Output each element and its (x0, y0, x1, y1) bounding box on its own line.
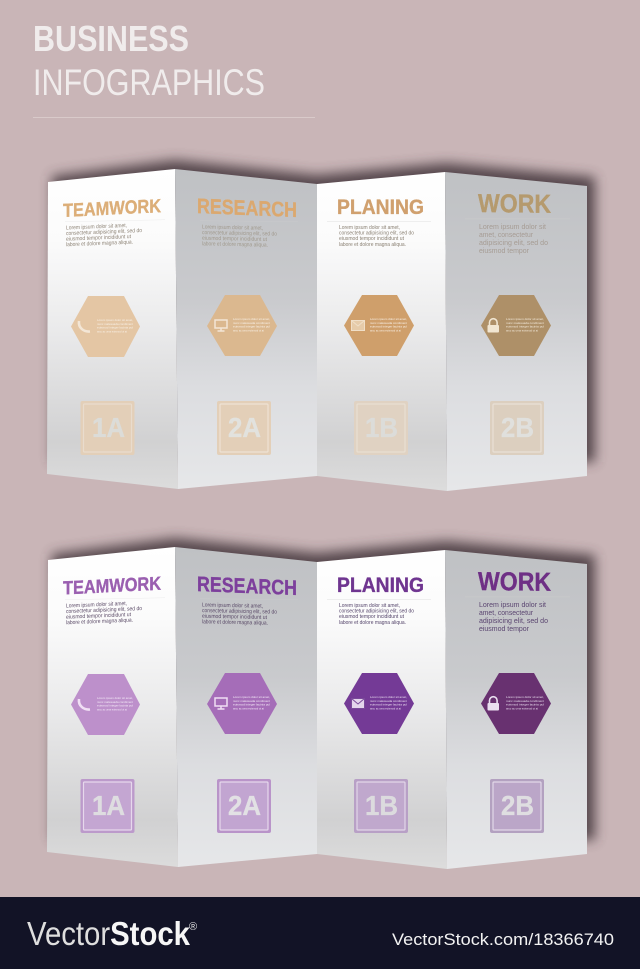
hexagon with monitor icon: arcu ac urna euismod ut at (233, 706, 264, 710)
panel: research (175, 169, 317, 489)
hexagon with lock icon: nunc malesuada condiment (506, 699, 544, 703)
hexagon with phone icon: arcu ac urna euismod ut at (97, 329, 127, 333)
text block: planing: consectetur adipisicing elit, sed do (339, 609, 414, 615)
heading: work: WORK (478, 188, 551, 219)
text block: teamwork: eiusmod tempor incididunt ut (66, 612, 131, 621)
text block: work: eiusmod tempor (479, 246, 529, 255)
panel: teamwork (47, 547, 178, 867)
brochure shadow (52, 538, 595, 840)
text block: work: amet, consectetur (479, 230, 533, 239)
hexagon with phone icon: Lorem ipsum dolor sit amet, (97, 696, 133, 700)
text block: research: eiusmod tempor incididunt ut (202, 614, 267, 621)
hexagon with lock icon (481, 295, 551, 356)
badge: 2A: 2A (228, 412, 261, 443)
hexagon with envelope icon: nunc malesuada condiment (370, 699, 407, 703)
text block: research: Lorem ipsum dolor sit amet, (202, 225, 263, 232)
brochure: orange (47, 160, 595, 491)
hexagon with lock icon: arcu ac urna euismod ut at (506, 706, 538, 710)
hexagon with lock icon: euismod integer lacinia pul (506, 325, 545, 329)
hexagon with lock icon (481, 673, 551, 734)
hexagon with lock icon: euismod integer lacinia pul (506, 703, 545, 707)
hexagon with monitor icon: euismod integer lacinia pul (233, 703, 271, 707)
text block: work: adipisicing elit, sed do (479, 616, 548, 625)
text block: planing (339, 225, 414, 248)
text block: work: amet, consectetur (479, 608, 533, 617)
text block: planing (339, 603, 414, 626)
hexagon with phone icon: Lorem ipsum dolor sit amet, (97, 318, 133, 322)
text block: work: eiusmod tempor (479, 624, 529, 633)
hexagon with monitor icon: Lorem ipsum dolor sit amet, (233, 695, 270, 699)
badge: 2B (490, 779, 544, 833)
panel: planing (317, 550, 447, 869)
text block: teamwork: labore et dolore magna aliqua. (66, 618, 133, 626)
hexagon with phone icon: nunc malesuada condiment (97, 322, 133, 326)
badge: 1A: 1A (92, 790, 125, 821)
badge: 2B: 2B (501, 412, 534, 443)
hexagon with envelope icon (344, 673, 414, 734)
text block: planing: Lorem ipsum dolor sit amet, (339, 603, 400, 609)
heading: research: RESEARCH (197, 573, 297, 600)
text block: work (479, 600, 548, 633)
hexagon with lock icon: nunc malesuada condiment (506, 321, 544, 325)
hexagon with phone icon (71, 296, 140, 357)
VectorStock logo: VectorStock (27, 915, 191, 952)
badge: 2A (217, 401, 271, 455)
badge: 2B: 2B (501, 790, 534, 821)
hexagon with monitor icon (207, 295, 277, 356)
heading: planing: PLANING (337, 196, 424, 219)
hexagon with monitor icon (207, 673, 277, 734)
badge: 1B: 1B (365, 412, 398, 443)
brochure: purple (47, 538, 595, 869)
text block: research: labore et dolore magna aliqua. (202, 241, 268, 249)
hexagon with lock icon: Lorem ipsum dolor sit amet, (506, 695, 544, 699)
panel: work (445, 550, 587, 869)
hexagon with lock icon: arcu ac urna euismod ut at (506, 328, 538, 332)
text block: research: consectetur adipisicing elit, sed do (202, 608, 277, 616)
badge: 2B (490, 401, 544, 455)
hexagon with monitor icon: nunc malesuada condiment (233, 321, 270, 325)
footer bar (0, 897, 640, 969)
text block: work: Lorem ipsum dolor sit (479, 222, 546, 231)
text block: planing: consectetur adipisicing elit, sed do (339, 231, 414, 237)
hexagon with phone icon: arcu ac urna euismod ut at (97, 707, 127, 711)
hexagon with envelope icon: euismod integer lacinia pul (370, 703, 408, 707)
panel: research (175, 547, 317, 867)
text block: research: labore et dolore magna aliqua. (202, 619, 268, 627)
text block: teamwork: Lorem ipsum dolor sit amet, (66, 601, 127, 609)
text block: research: Lorem ipsum dolor sit amet, (202, 603, 263, 610)
text block: teamwork (66, 600, 142, 626)
badge: 1B (354, 779, 408, 833)
badge: 1A: 1A (92, 412, 125, 443)
heading: work: WORK (478, 566, 551, 597)
text block: teamwork: eiusmod tempor incididunt ut (66, 234, 131, 243)
badge: 2A: 2A (228, 790, 261, 821)
text block: planing: eiusmod tempor incididunt ut (339, 236, 404, 242)
hexagon with phone icon: euismod integer lacinia pul (97, 704, 133, 708)
heading: teamwork: TEAMWORK (63, 196, 161, 222)
badge: 1A (80, 401, 134, 455)
image id: VectorStock.com/18366740 (392, 931, 614, 949)
hexagon with envelope icon: Lorem ipsum dolor sit amet, (370, 695, 407, 699)
title (33, 18, 265, 103)
text block: planing: Lorem ipsum dolor sit amet, (339, 225, 400, 231)
hexagon with envelope icon (344, 295, 414, 356)
registered mark: ® (189, 921, 197, 933)
heading: teamwork: TEAMWORK (63, 574, 161, 599)
hexagon with phone icon: nunc malesuada condiment (97, 700, 133, 704)
heading: planing: PLANING (337, 574, 424, 597)
hexagon with envelope icon: arcu ac urna euismod ut at (370, 328, 401, 332)
text block: research: eiusmod tempor incididunt ut (202, 236, 267, 243)
badge: 1B: 1B (365, 790, 398, 821)
hexagon with monitor icon: arcu ac urna euismod ut at (233, 328, 264, 332)
text block: research (202, 225, 277, 249)
text block: teamwork: consectetur adipisicing elit, sed do (66, 606, 142, 615)
badge: 1A (80, 779, 134, 833)
hexagon with envelope icon: euismod integer lacinia pul (370, 325, 408, 329)
text block: teamwork: labore et dolore magna aliqua. (66, 240, 133, 248)
hexagon with envelope icon: Lorem ipsum dolor sit amet, (370, 317, 407, 321)
panel: planing (317, 172, 447, 491)
text block: research: consectetur adipisicing elit, sed do (202, 230, 277, 238)
hexagon with envelope icon: arcu ac urna euismod ut at (370, 706, 401, 710)
text block: planing: labore et dolore magna aliqua. (339, 620, 406, 626)
hexagon with phone icon (71, 674, 140, 735)
title: INFOGRAPHICS (33, 62, 265, 103)
hexagon with monitor icon: euismod integer lacinia pul (233, 325, 271, 329)
text block: work: Lorem ipsum dolor sit (479, 600, 546, 609)
panel: work (445, 172, 587, 491)
text block: teamwork (66, 222, 142, 248)
hexagon with phone icon: euismod integer lacinia pul (97, 326, 133, 330)
hexagon with monitor icon: Lorem ipsum dolor sit amet, (233, 317, 270, 321)
text block: planing: labore et dolore magna aliqua. (339, 242, 406, 248)
panel: teamwork (47, 169, 178, 489)
text block: teamwork: Lorem ipsum dolor sit amet, (66, 223, 127, 231)
heading: research: RESEARCH (197, 195, 297, 222)
text block: planing: eiusmod tempor incididunt ut (339, 614, 404, 620)
text block: work (479, 222, 548, 255)
text block: teamwork: consectetur adipisicing elit, sed do (66, 228, 142, 237)
text block: research (202, 603, 277, 627)
hexagon with envelope icon: nunc malesuada condiment (370, 321, 407, 325)
hexagon with lock icon: Lorem ipsum dolor sit amet, (506, 317, 544, 321)
brochure shadow (52, 160, 595, 462)
badge: 2A (217, 779, 271, 833)
text block: work: adipisicing elit, sed do (479, 238, 548, 247)
badge: 1B (354, 401, 408, 455)
title: BUSINESS (33, 18, 189, 59)
hexagon with monitor icon: nunc malesuada condiment (233, 699, 270, 703)
